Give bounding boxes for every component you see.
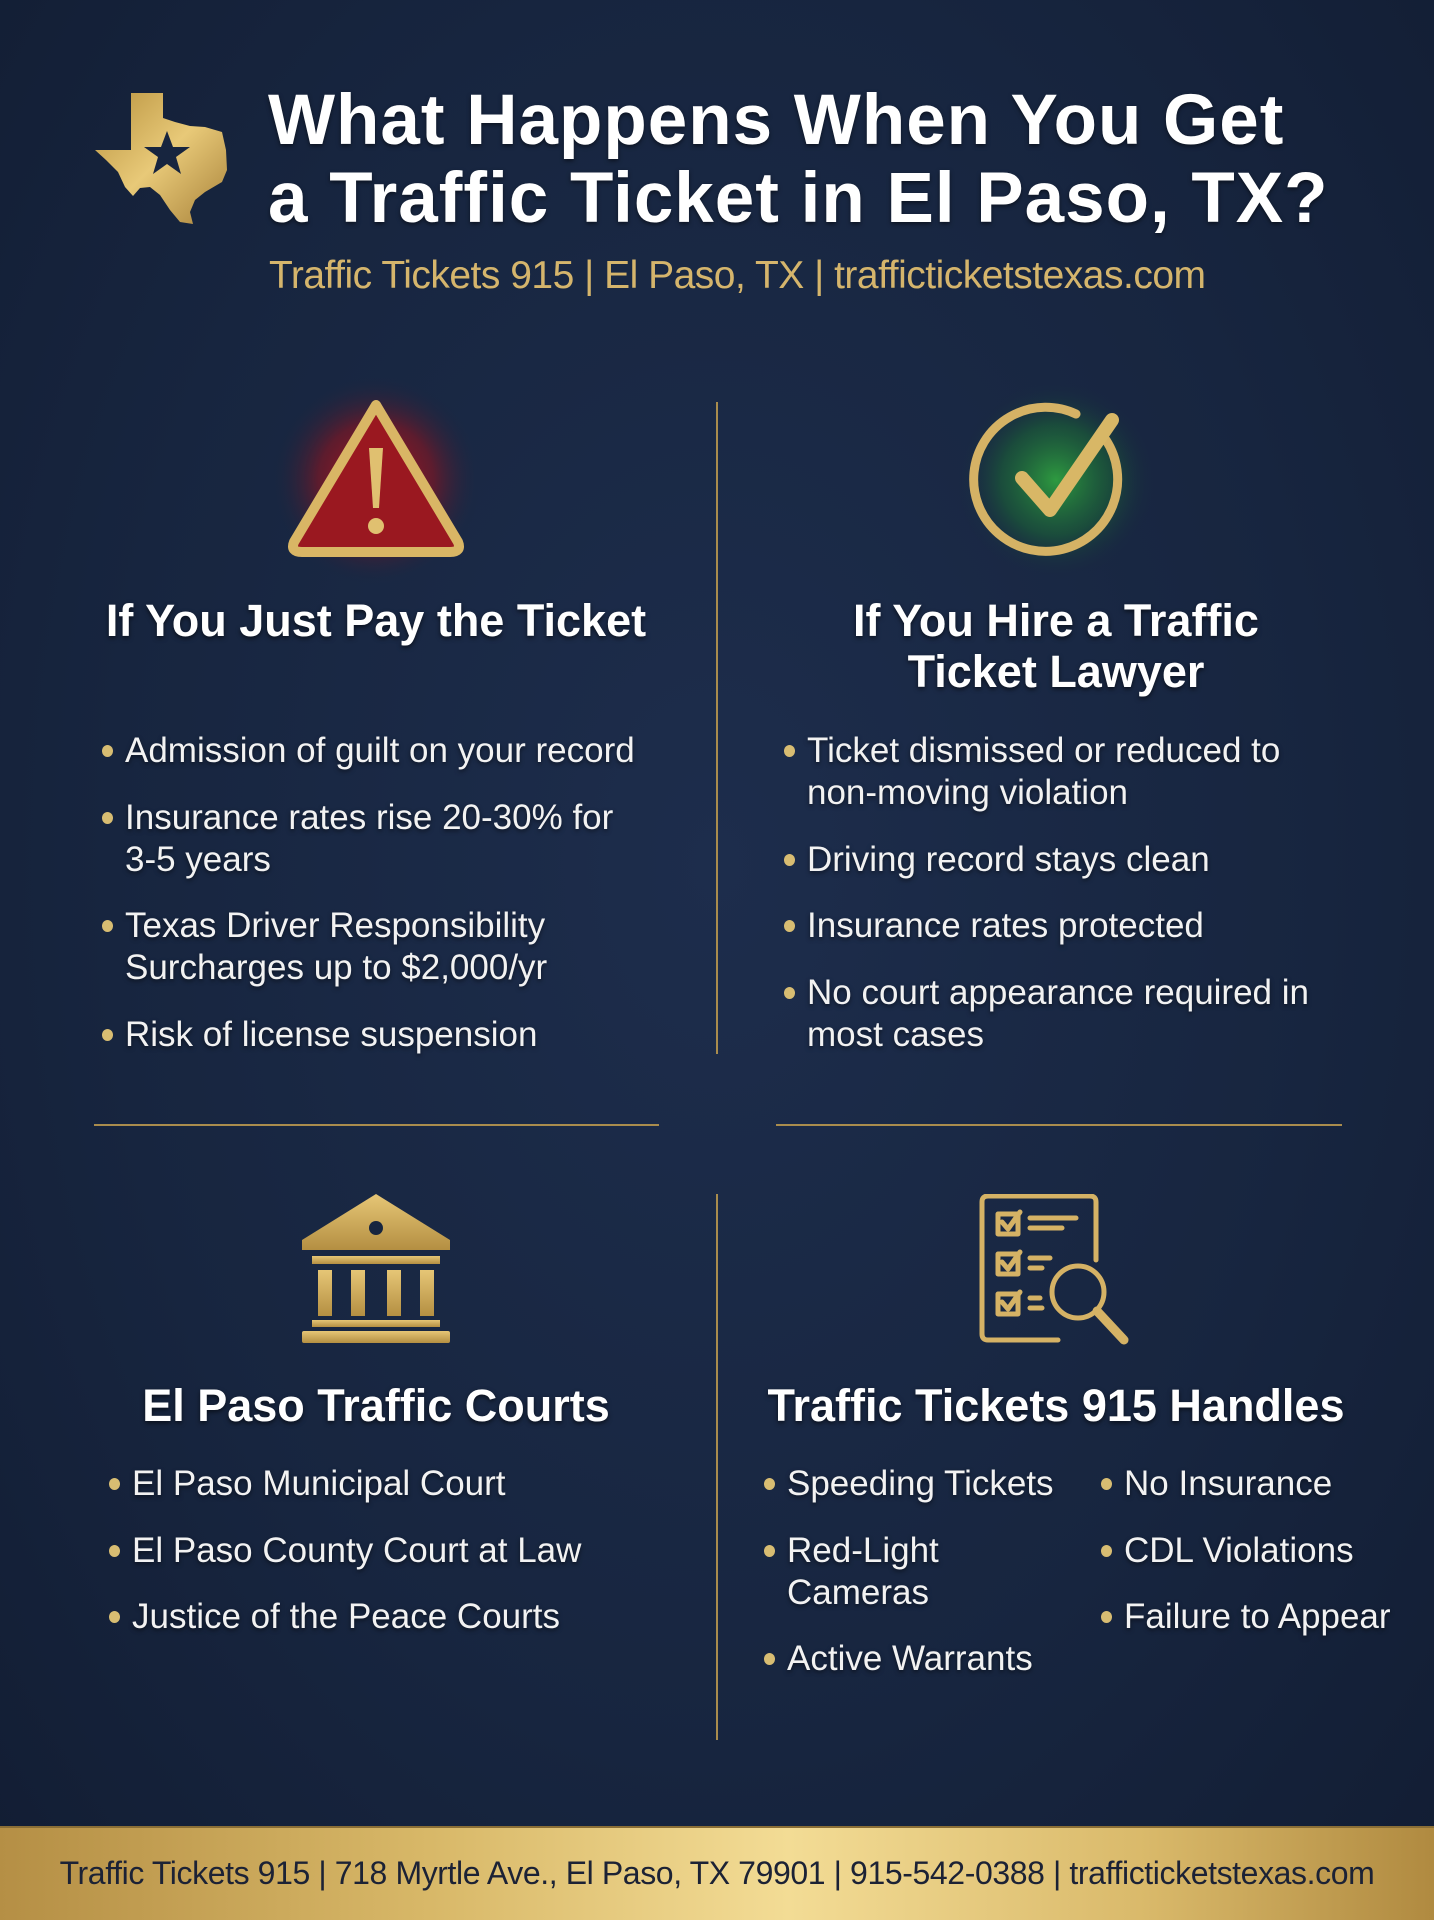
icon: courthouse <box>302 1194 450 1343</box>
bullets <box>102 731 635 1056</box>
bullets: Speeding Tickets <box>787 1464 1054 1503</box>
bullets: Admission of guilt on your record <box>125 731 635 770</box>
bullets: Failure to Appear <box>1124 1597 1391 1636</box>
bullets: Ticket dismissed or reduced to <box>807 731 1280 770</box>
heading <box>853 595 1259 700</box>
bullets: Justice of the Peace Courts <box>132 1597 560 1636</box>
bullets: No Insurance <box>1124 1464 1332 1503</box>
bullets: non-moving violation <box>807 773 1128 812</box>
heading: If You Hire a Traffic <box>853 595 1259 646</box>
footer <box>0 1826 1434 1920</box>
footer: Traffic Tickets 915 | 718 Myrtle Ave., El Paso, TX 79901 | 915-542-0388 | trafficticketstexas.com <box>60 1855 1374 1891</box>
bullets: Surcharges up to $2,000/yr <box>125 948 547 987</box>
bullets: El Paso County Court at Law <box>132 1531 581 1570</box>
heading: El Paso Traffic Courts <box>142 1380 610 1431</box>
heading: If You Just Pay the Ticket <box>106 595 646 646</box>
bullets: Cameras <box>787 1573 929 1612</box>
icon: warning <box>288 392 464 568</box>
bullets: Red-Light <box>787 1531 939 1570</box>
title <box>268 81 1329 238</box>
subtitle: Traffic Tickets 915 | El Paso, TX | trafficticketstexas.com <box>269 254 1206 297</box>
bullets <box>784 731 1309 1054</box>
panel: hire a lawyer <box>784 402 1309 1054</box>
heading: Ticket Lawyer <box>908 646 1204 697</box>
bullets <box>764 1464 1391 1678</box>
icon: checklist search <box>980 1194 1128 1344</box>
panel: pay the ticket <box>102 392 647 1056</box>
heading: Traffic Tickets 915 Handles <box>768 1380 1344 1431</box>
bullets: El Paso Municipal Court <box>132 1464 506 1503</box>
bullets: Insurance rates rise 20-30% for <box>125 798 613 837</box>
bullets: Texas Driver Responsibility <box>125 906 545 945</box>
icon: check <box>969 402 1134 558</box>
bullets: No court appearance required in <box>807 973 1309 1012</box>
bullets: most cases <box>807 1015 984 1054</box>
title: What Happens When You Get <box>268 81 1284 160</box>
bullets: Driving record stays clean <box>807 840 1210 879</box>
icon: texas state <box>95 93 227 224</box>
bullets <box>109 1464 582 1636</box>
panel: courts <box>109 1194 610 1636</box>
bullets: 3-5 years <box>125 840 271 879</box>
bullets: Active Warrants <box>787 1639 1033 1678</box>
bullets: Risk of license suspension <box>125 1015 537 1054</box>
bullets: Insurance rates protected <box>807 906 1204 945</box>
title: a Traffic Ticket in El Paso, TX? <box>268 159 1329 238</box>
bullets: CDL Violations <box>1124 1531 1354 1570</box>
panel: handles <box>764 1194 1391 1678</box>
